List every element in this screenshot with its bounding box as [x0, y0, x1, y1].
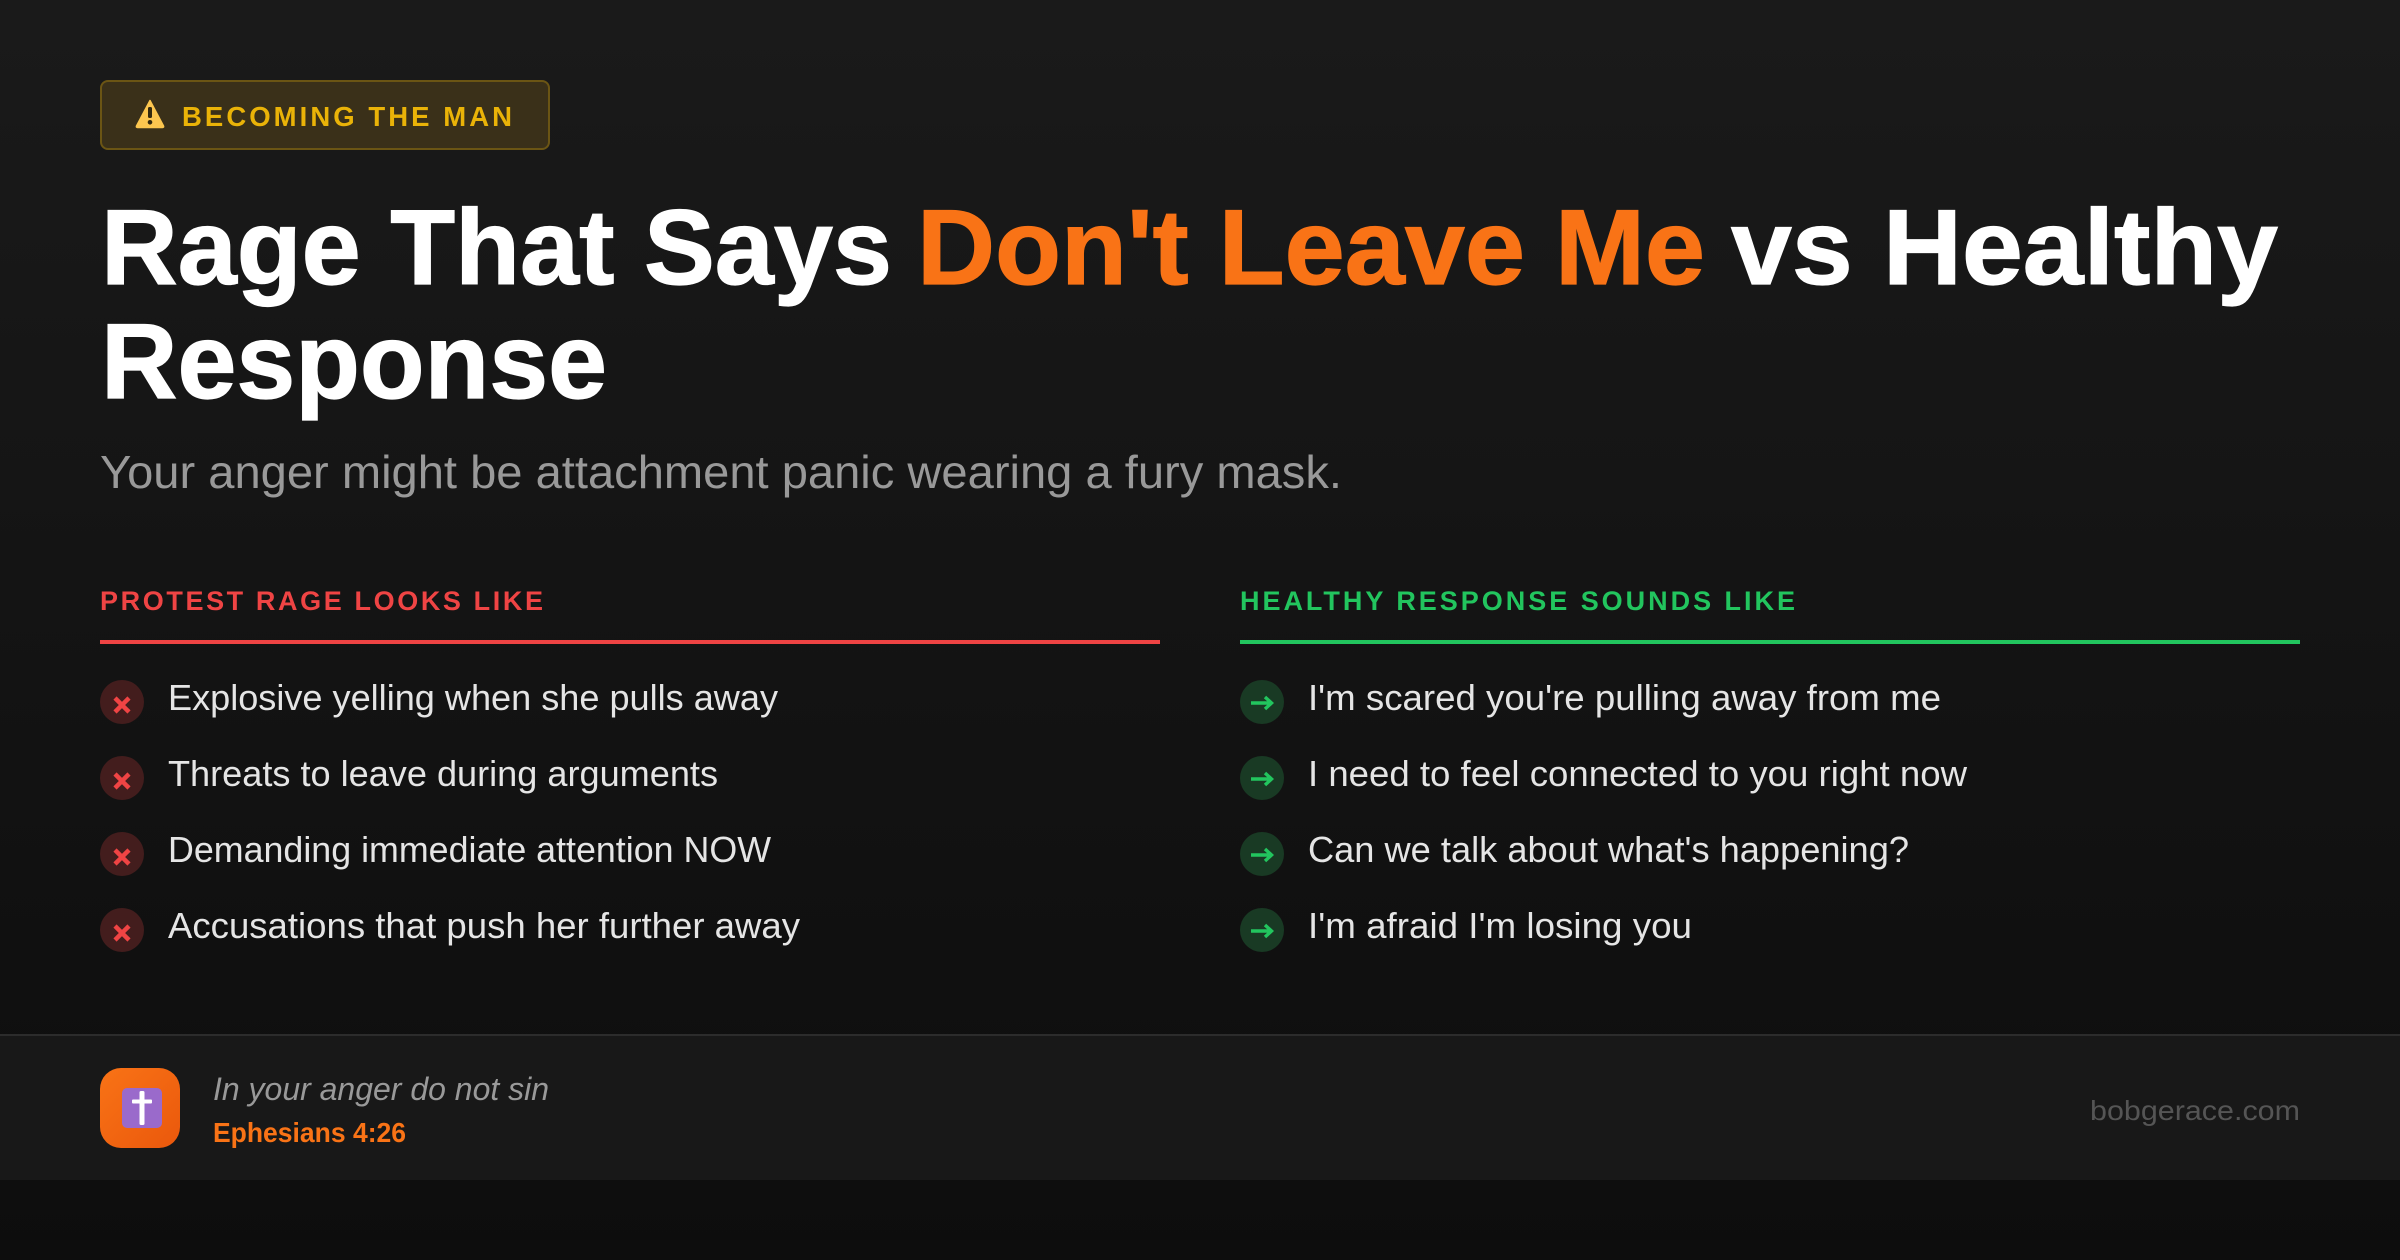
site url: bobgerace.com	[2090, 1095, 2300, 1126]
item 2: I need to feel connected to you right now	[1308, 753, 1968, 794]
icon: warning triangle	[136, 100, 164, 128]
panel: protest rage	[100, 586, 1160, 952]
heading: healthy response: HEALTHY RESPONSE SOUNDS LIKE	[1240, 586, 1795, 616]
item 3: Can we talk about what's happening?	[1308, 829, 1909, 870]
title highlight: Don't Leave Me	[917, 187, 1705, 307]
item 3: Demanding immediate attention NOW	[168, 829, 771, 870]
title: Response	[101, 301, 607, 421]
item 1: I'm scared you're pulling away from me	[1308, 677, 1941, 718]
item 1: Explosive yelling when she pulls away	[168, 677, 778, 718]
title	[101, 187, 2278, 421]
subtitle: Your anger might be attachment panic wearing a fury mask.	[100, 446, 1342, 498]
heading: protest rage: PROTEST RAGE LOOKS LIKE	[100, 586, 543, 616]
badge label: BECOMING THE MAN	[182, 101, 512, 132]
title: vs Healthy	[1731, 187, 2278, 307]
item 4: Accusations that push her further away	[168, 905, 800, 946]
item 4: I'm afraid I'm losing you	[1308, 905, 1692, 946]
item 2: Threats to leave during arguments	[168, 753, 718, 794]
footer bar	[0, 1034, 2400, 1180]
badge: becoming the man	[101, 81, 549, 149]
title: Rage That Says	[101, 187, 892, 307]
scripture quote: In your anger do not sin	[213, 1071, 549, 1107]
panel: healthy response	[1240, 586, 2300, 952]
icon: cross	[100, 1068, 180, 1148]
scripture reference: Ephesians 4:26	[213, 1117, 406, 1148]
